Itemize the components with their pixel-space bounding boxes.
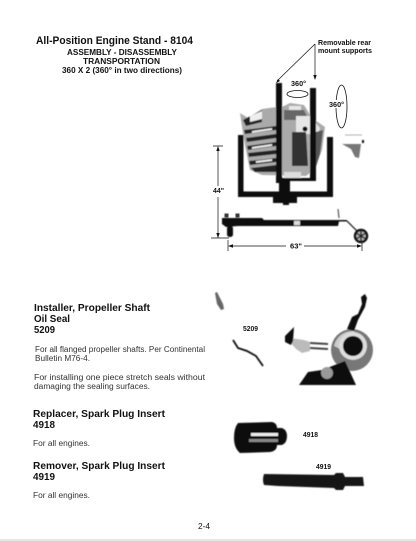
body text: For all engines. [33,439,90,448]
label 4919: 4919 [316,464,331,471]
section: installer propeller shaft oil seal: Bulletin M76-4. [35,354,90,363]
photo: tool 4919 [263,464,364,490]
rotation label: vertical 360: 360° [329,101,344,109]
section: installer propeller shaft oil seal [34,303,206,391]
base [299,361,356,385]
wheel [347,221,367,242]
caster [227,226,233,237]
left handle [310,342,328,350]
hub flange [331,329,373,371]
rotation label: vertical 360 [329,85,347,128]
center column [273,181,297,205]
subtitle: rotation: 360 X 2 (360° in two directions) [62,66,182,75]
left post [276,83,282,183]
section: remover spark plug insert [33,461,166,500]
frame [238,135,333,197]
body text: For all flanged propeller shafts. Per Continental [35,345,205,354]
right post [310,88,316,181]
photo: tool 4918 [234,422,318,453]
subtitle: assembly: ASSEMBLY - DISASSEMBLY [67,48,178,57]
section: installer propeller shaft oil seal: Oil Seal [34,314,70,325]
engine stand [222,83,367,242]
section: replacer spark plug insert [33,409,166,448]
title: All-Position Engine Stand - 8104 [36,35,194,47]
section: installer propeller shaft oil seal: 5209 [34,325,55,336]
width dimension: 63 inches: 63" [290,244,302,250]
callout: removable rear mount supports [276,40,372,83]
page number: 2-4 [198,522,211,531]
subtitle: transportation: TRANSPORTATION [83,57,160,66]
side component [342,135,364,158]
rotation label: horizontal 360 [287,80,308,98]
height dimension: 44 inches: 44" [213,188,224,195]
callout: removable rear mount supports: Removable rear [318,40,371,47]
lower connector [282,178,316,181]
callout: removable rear mount supports: mount supports [318,48,372,55]
engine [240,103,325,178]
section: replacer spark plug insert: 4918 [33,420,55,431]
heading: Installer, Propeller Shaft [34,303,151,314]
heading block: engine stand [36,35,194,75]
label 5209: 5209 [243,326,258,333]
height dimension: 44 inches [211,146,229,238]
base rail [222,218,347,227]
rotation label: horizontal 360: 360° [291,80,306,88]
section: installer propeller shaft oil seal: For installing one piece stretch seals without [34,373,206,382]
section: remover spark plug insert: 4919 [33,472,55,483]
body text: For all engines. [33,491,90,500]
heading: Replacer, Spark Plug Insert [33,409,166,420]
photo: tool 5209 [215,292,373,385]
label 4918: 4918 [303,432,318,439]
speck fragment [215,292,224,310]
diagram: engine stand photo with dimensions [211,40,372,251]
width dimension: 63 inches [228,240,362,251]
section: installer propeller shaft oil seal: damaging the sealing surfaces. [34,382,150,391]
heading: Remover, Spark Plug Insert [33,461,166,472]
curved seal tool [233,340,263,366]
upright handle [347,294,367,331]
